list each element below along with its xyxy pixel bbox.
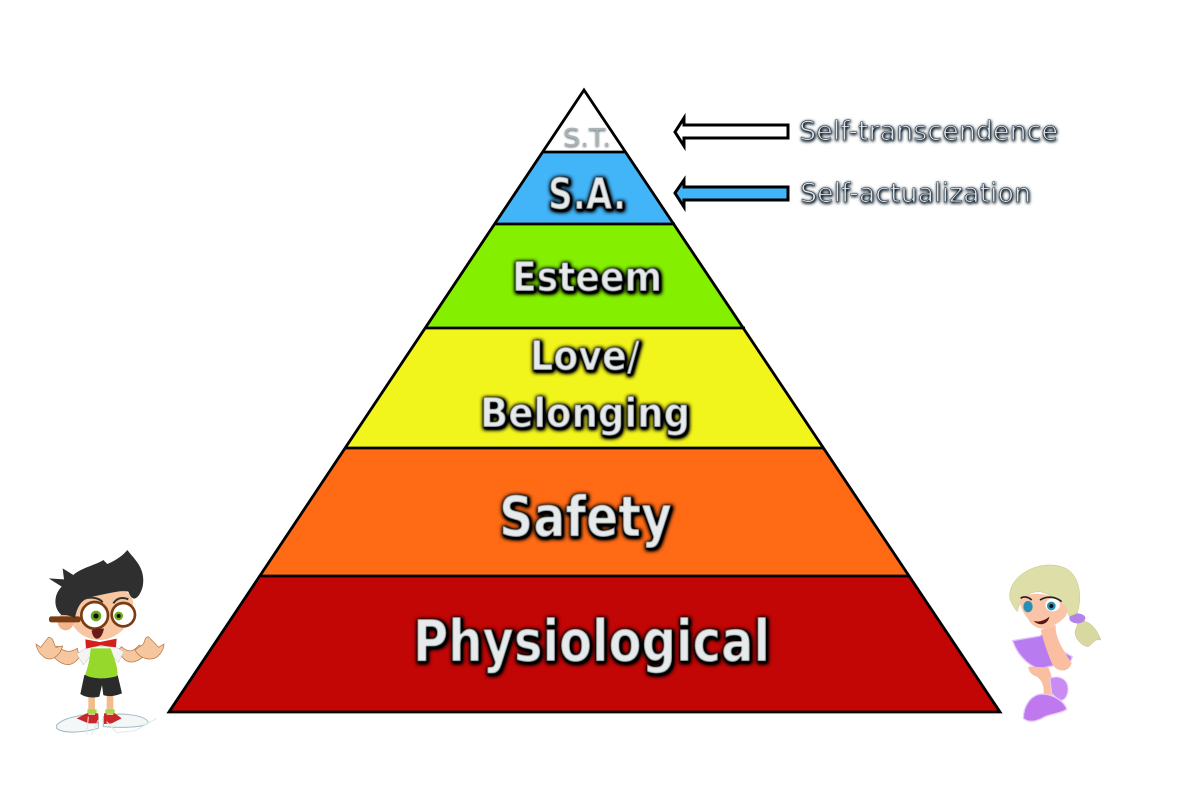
pyramid outline and dividers [169, 90, 1000, 712]
boy glasses arm [49, 616, 81, 622]
label: S.T.: S.T. [563, 123, 611, 152]
girl eyes [1021, 597, 1062, 612]
boy hair [49, 550, 143, 618]
girl mouth [1033, 617, 1049, 624]
boy hands [36, 637, 164, 659]
girl front slipper [1023, 694, 1067, 721]
layer: safety [261, 448, 909, 576]
character: girl with ponytail [1010, 565, 1101, 721]
boy socks [87, 709, 115, 713]
label: S.A.: S.A. [548, 169, 626, 220]
character: boy with glasses [36, 550, 164, 735]
layer: self-actualization [495, 152, 675, 224]
layer: love and belonging [346, 328, 824, 448]
layer: self-transcendence [543, 90, 625, 152]
girl leg [1028, 667, 1054, 697]
girl hair [1010, 565, 1080, 617]
boy shirt [77, 647, 124, 665]
girl hair tie [1069, 613, 1085, 623]
boy glasses [81, 602, 135, 629]
boy shoes [57, 713, 157, 735]
layer: physiological [169, 576, 1000, 712]
label: Safety: Safety [499, 485, 672, 550]
boy shorts [80, 675, 122, 697]
girl dress [1013, 630, 1072, 669]
girl arm [1041, 625, 1072, 671]
text: Self-transcendence: Self-transcendence [799, 116, 1058, 147]
girl ponytail [1075, 621, 1101, 647]
boy legs [88, 693, 113, 715]
label: Belonging: Belonging [480, 389, 690, 437]
girl face [1020, 594, 1067, 629]
label: Esteem: Esteem [512, 253, 662, 301]
arrow: self-actualization [675, 180, 788, 207]
text: Self-actualization: Self-actualization [800, 178, 1031, 209]
label: Love/: Love/ [530, 332, 640, 380]
boy head [69, 586, 133, 640]
boy eyebrows [83, 598, 128, 603]
pyramid [169, 90, 1000, 712]
label: Physiological: Physiological [413, 607, 770, 675]
boy arms [48, 645, 148, 665]
boy mouth [92, 628, 104, 639]
girl back slipper [1050, 677, 1068, 700]
arrow: self-transcendence [675, 118, 788, 146]
boy ear [58, 613, 74, 630]
boy bow tie [85, 639, 117, 649]
layer: esteem [425, 224, 745, 328]
